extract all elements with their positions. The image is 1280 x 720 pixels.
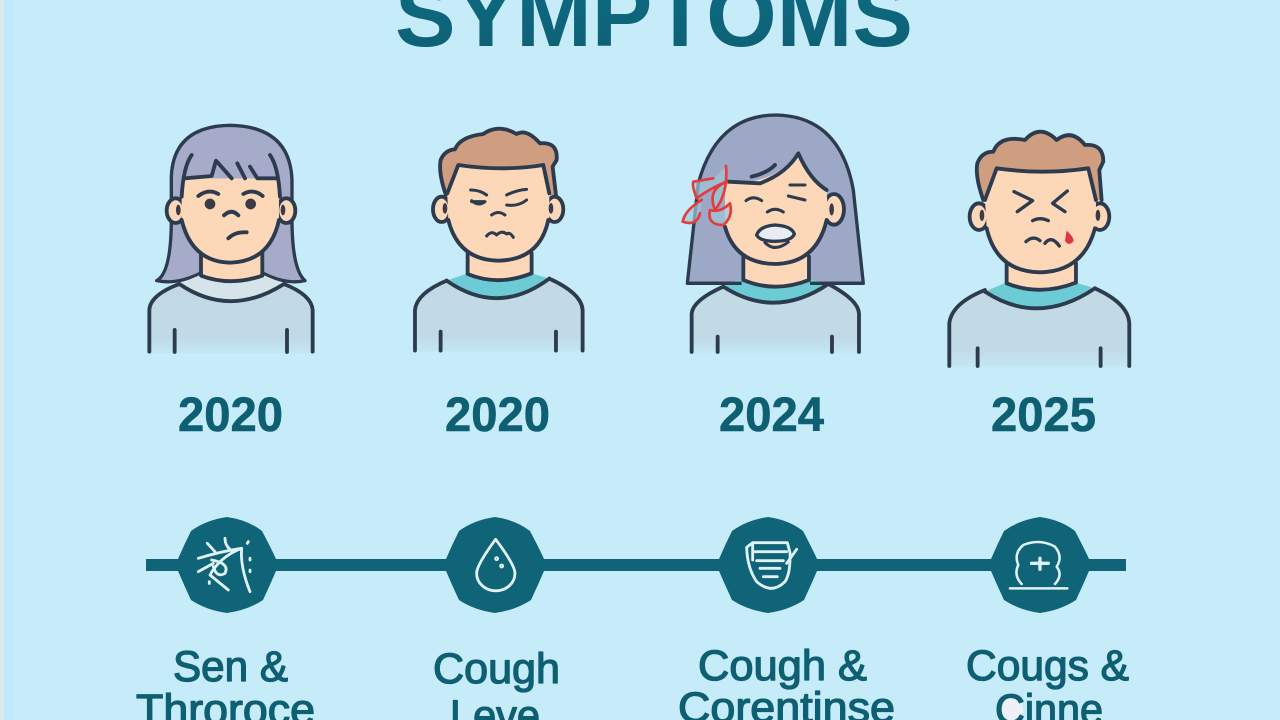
label: symptom 2: Cough <box>433 645 560 693</box>
person 3: woman in pain, 2024 <box>683 115 863 353</box>
person 2: boy, 2020 <box>415 129 583 352</box>
year labels: 2020 <box>445 389 550 442</box>
year labels <box>178 389 1096 442</box>
icon: lungs scribble <box>198 538 250 592</box>
timeline node: symptom 4 <box>986 517 1094 613</box>
label: symptom 2 <box>433 645 560 720</box>
timeline node: symptom 2 <box>441 517 549 613</box>
label: symptom 3: Cough & <box>698 642 867 690</box>
label: symptom 4: Cougs & <box>966 642 1129 690</box>
year labels: 2024 <box>719 389 824 442</box>
label: symptom 4 <box>966 642 1129 720</box>
timeline node: symptom 3 <box>714 517 822 613</box>
label: symptom 1: Sen & <box>173 643 288 691</box>
icon: face mask <box>747 543 797 588</box>
person 1: woman, 2020 <box>149 125 313 353</box>
timeline node: symptom 1 <box>173 517 281 613</box>
label: symptom 1 <box>136 643 315 720</box>
year labels: 2025 <box>991 389 1096 442</box>
icon: red pain scribble <box>683 166 731 225</box>
year labels: 2020 <box>178 389 283 442</box>
label: symptom 3 <box>678 642 895 720</box>
icon: water drop <box>477 539 515 591</box>
timeline bar <box>146 559 1126 571</box>
icon: head with medical cross <box>1010 542 1067 588</box>
person 4: boy coughing, 2025 <box>949 132 1129 367</box>
